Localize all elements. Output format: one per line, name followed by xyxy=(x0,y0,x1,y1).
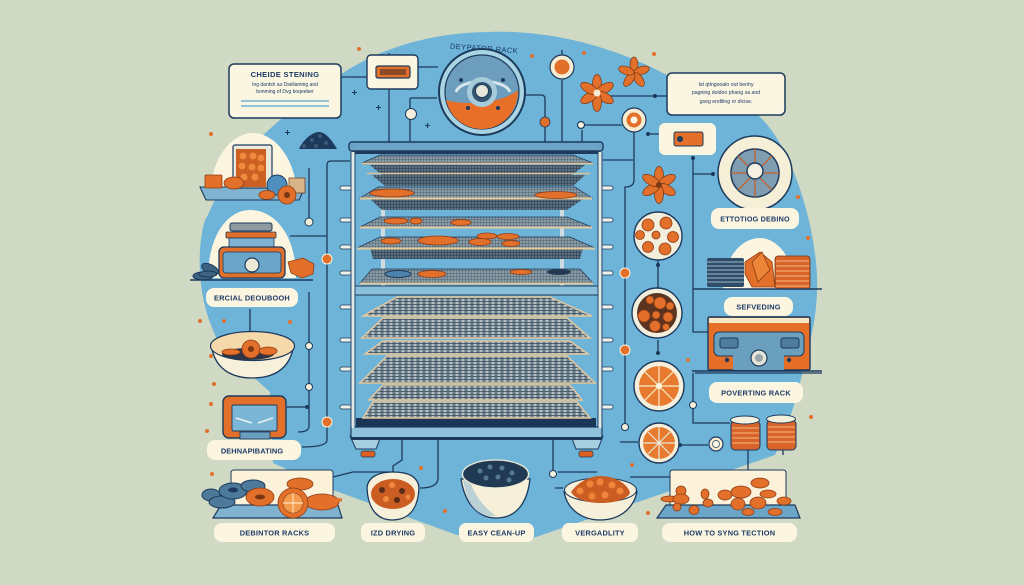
node: orange left bottom xyxy=(322,417,332,427)
label: izd drying: IZD DRYING xyxy=(371,528,415,538)
label: etthotiog debino: ETTOTIOG DEBINO xyxy=(720,214,790,224)
node: orange right top xyxy=(620,268,630,278)
body xyxy=(219,247,285,278)
panel: cheide stening xyxy=(229,64,341,118)
label: debintor racks: DEBINTOR RACKS xyxy=(240,528,309,538)
node: white top xyxy=(406,108,416,120)
label: poverting rack xyxy=(709,382,803,403)
sparkle 2 xyxy=(376,105,381,110)
sparkle 4 xyxy=(352,90,357,95)
label: vergadlity: VERGADLITY xyxy=(575,528,625,538)
lower tray 2 xyxy=(362,318,590,338)
icon: dehydrator device left xyxy=(223,396,286,439)
feet xyxy=(350,436,381,449)
tray 4 xyxy=(360,217,592,228)
icon: dial xyxy=(439,49,525,135)
node: orange right bottom xyxy=(620,345,630,355)
lower tray 6 xyxy=(363,402,590,418)
right post xyxy=(598,152,602,428)
side pegs xyxy=(340,186,613,409)
orange sparkles xyxy=(198,47,813,515)
cream backdrop xyxy=(723,238,795,289)
blue backdrop shape xyxy=(200,32,817,538)
lower tray 4 xyxy=(360,356,595,383)
top cylinder xyxy=(226,223,276,247)
icon: orange stack right xyxy=(766,415,796,450)
node: white left mid xyxy=(306,342,312,350)
node: white right xyxy=(622,424,628,430)
dots xyxy=(305,94,750,479)
icon: berry pile xyxy=(299,132,337,149)
icon: bowl of orange pieces xyxy=(564,476,637,520)
node: white right shelf xyxy=(690,402,696,408)
label: dehydrating xyxy=(207,440,301,460)
label: how to sing tection xyxy=(662,523,797,542)
icon: small bowl xyxy=(367,472,419,520)
icon: orange badge xyxy=(550,55,574,79)
tray 6 xyxy=(360,269,593,284)
shelf xyxy=(200,187,305,200)
lower tray 1 xyxy=(363,297,592,316)
dehydrator rack xyxy=(340,142,613,457)
label: ercial deoubooh xyxy=(206,288,298,307)
discs xyxy=(193,261,220,280)
icon: small control panel xyxy=(367,55,418,89)
group: jar on shelf xyxy=(200,133,305,204)
group: stacks on shelf xyxy=(693,238,822,289)
sparkles xyxy=(285,90,430,135)
icon: orange slice large xyxy=(634,361,684,411)
icon: orange slice small xyxy=(639,423,679,463)
label: poverting rack: POVERTING RACK xyxy=(721,388,791,398)
node: orange top xyxy=(540,117,550,127)
jar xyxy=(233,145,272,188)
icon: bowl of berries xyxy=(461,460,530,518)
node: white left low xyxy=(306,384,312,390)
note line 3: gseg endiling or dicise. xyxy=(700,99,752,105)
node: white bottom xyxy=(550,470,556,478)
node: orange left top xyxy=(322,254,332,264)
tray 2 xyxy=(367,174,590,186)
label: how to sing tection: HOW TO SYNG TECTION xyxy=(684,528,775,538)
panel rules xyxy=(241,101,329,106)
icon: white node top xyxy=(578,122,584,128)
cream backdrop xyxy=(208,210,296,278)
connector lines xyxy=(250,50,822,488)
icon: bowl with rings xyxy=(210,332,294,378)
label: sefveding: SEFVEDING xyxy=(736,302,781,312)
dark stack xyxy=(707,258,744,287)
base bar xyxy=(351,427,602,438)
group: device on shelf xyxy=(190,210,314,280)
icon: wheel xyxy=(718,136,792,210)
label: dehydrating: DEHNAPIBATING xyxy=(221,446,283,456)
panel: right note xyxy=(667,73,785,115)
icon: flower center xyxy=(641,166,677,204)
icon: tray of rings and slices xyxy=(202,470,342,518)
sparkle 3 xyxy=(425,123,430,128)
lower tray 5 xyxy=(369,385,582,400)
label: ercial deoubooh: ERCIAL DEOUBOOH xyxy=(214,294,290,302)
small nodes xyxy=(305,94,750,479)
cream backdrop xyxy=(210,133,297,198)
icon: ring xyxy=(622,108,646,132)
icon: flower large xyxy=(579,74,615,112)
icon: dehydrator device right xyxy=(692,317,822,371)
orange stack xyxy=(775,256,810,289)
shelf line xyxy=(692,370,822,372)
label: sefveding xyxy=(724,297,793,316)
panel body text line 2: bonming of Dvg boqeeber xyxy=(256,89,314,95)
lower tray 3 xyxy=(365,341,588,354)
label: vergadlity xyxy=(562,523,638,542)
dried pieces xyxy=(205,175,305,204)
inner posts xyxy=(383,205,562,290)
label: izd drying xyxy=(361,523,425,542)
label: easy cean-up xyxy=(459,523,534,542)
sparkle xyxy=(285,130,290,135)
tray 3 xyxy=(360,187,592,210)
left post xyxy=(352,152,354,428)
orange piece xyxy=(288,258,314,278)
tray 1 xyxy=(362,155,593,175)
icon: bowl of orange food xyxy=(632,288,682,338)
icon: orange stack left xyxy=(730,416,760,450)
note line 1: Ist qtingooalo out benhy xyxy=(698,82,754,88)
icon: flower small xyxy=(618,57,650,88)
node: white left xyxy=(305,218,313,226)
mid bar xyxy=(353,286,599,295)
icon: tray of dried pieces xyxy=(657,470,800,518)
top bar xyxy=(349,142,603,151)
icon: switch card xyxy=(659,123,716,155)
icon: ring small xyxy=(709,437,723,451)
tray 5 xyxy=(357,233,595,259)
label: etthotiog debino xyxy=(711,208,799,229)
note line 2: pagning doidoo phang sa and xyxy=(692,90,760,96)
panel body text: Ing dantsh sa Dsellaming and xyxy=(252,82,318,88)
shelf line xyxy=(693,288,822,290)
shelf xyxy=(190,279,313,281)
bottom dark xyxy=(356,418,596,428)
label: debintor racks xyxy=(214,523,335,542)
orange pieces xyxy=(745,252,775,287)
label: easy cean-up: EASY CEAN-UP xyxy=(467,528,526,538)
icon: plate of slices xyxy=(634,212,682,260)
heading: dehydrator rack: DEYPATOR RACK xyxy=(450,42,518,55)
panel heading: CHEIDE STENING xyxy=(251,70,319,79)
